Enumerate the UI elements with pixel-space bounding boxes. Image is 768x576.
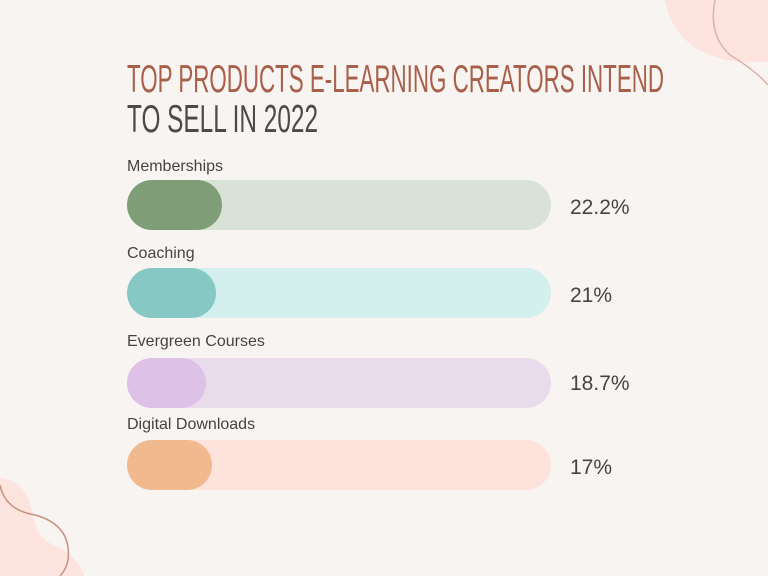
value: 21%: 21% xyxy=(570,284,612,307)
label: Memberships: Memberships xyxy=(127,158,223,175)
value: 17%: 17% xyxy=(570,456,612,479)
bar: Memberships xyxy=(127,180,551,230)
label: Coaching: Coaching xyxy=(127,245,195,262)
value: 18.7%: 18.7% xyxy=(570,372,630,395)
bar: Coaching xyxy=(127,268,551,318)
title xyxy=(127,58,664,140)
bar: Digital Downloads xyxy=(127,440,551,490)
title: TO SELL IN 2022 xyxy=(127,98,318,140)
value: 22.2%: 22.2% xyxy=(570,196,630,219)
label: Digital Downloads: Digital Downloads xyxy=(127,416,255,433)
bar: Evergreen Courses xyxy=(127,358,551,408)
label: Evergreen Courses: Evergreen Courses xyxy=(127,333,265,350)
